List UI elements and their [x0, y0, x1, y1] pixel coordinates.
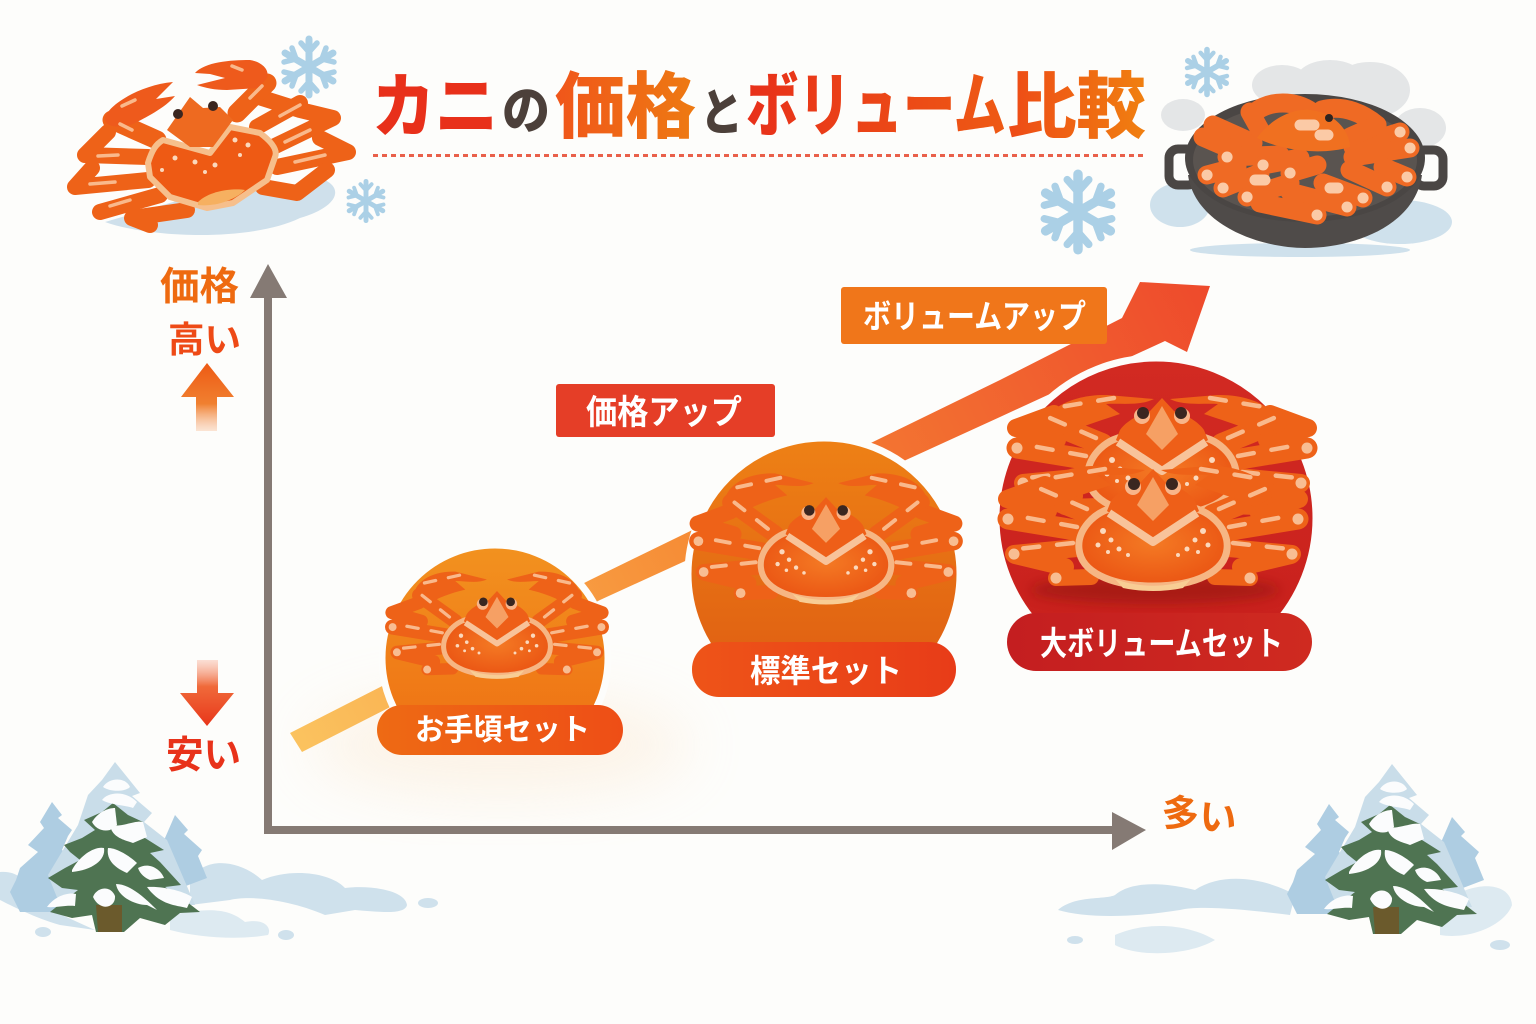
title: カニ: [372, 68, 498, 146]
illustration: crab top left: [75, 60, 348, 235]
icon: snowflake top right: [1187, 50, 1227, 94]
callout: price up: 価格アップ: [586, 394, 742, 432]
standard set label: [692, 642, 956, 697]
small set label: お手頃セット: [415, 714, 590, 747]
illustration: snow clouds behind pot: [1161, 60, 1446, 148]
title: [372, 67, 1146, 148]
title: と: [700, 85, 743, 141]
large set label: 大ボリュームセット: [1040, 625, 1283, 662]
title dotted underline: [373, 154, 1146, 157]
y axis arrow: [250, 264, 1146, 850]
illustration: snowy tree right: [1287, 764, 1484, 934]
large set rear crab: [1016, 395, 1308, 520]
label: low: 安い: [166, 735, 241, 777]
callout: price up: [556, 384, 775, 437]
illustration: snow bank right: [1058, 879, 1512, 953]
callout: volume up: [841, 287, 1107, 344]
y axis heading: 価格: [160, 266, 239, 309]
icon: down arrow: [180, 660, 234, 726]
large set label: [1007, 613, 1312, 671]
illustration: snowy tree left: [10, 762, 207, 932]
label: high: 高い: [168, 319, 241, 360]
peach wash under chart: [310, 695, 690, 795]
title: の: [502, 83, 550, 141]
icon: snowflake centre right: [1044, 174, 1112, 250]
callout: volume up: ボリュームアップ: [863, 298, 1086, 335]
standard set label: 標準セット: [750, 653, 902, 689]
icon: snowflake top left large: [284, 39, 334, 95]
title: 価格: [555, 68, 696, 148]
panel: small set: [377, 545, 623, 771]
panel: large set: [996, 358, 1316, 678]
illustration: snow bank left: [0, 863, 438, 940]
icon: snowflake top left small: [348, 181, 384, 221]
illustration: crab pot: [1169, 94, 1443, 248]
illustration: snow under pot: [1150, 183, 1452, 257]
icon: up arrow: [181, 363, 234, 431]
title: 比較: [1007, 68, 1146, 148]
large set front crab: [1007, 466, 1299, 591]
standard set crab: [698, 473, 954, 605]
x axis label: 多い: [1159, 792, 1239, 842]
title: ボリューム: [746, 67, 1006, 145]
panel: standard set: [688, 438, 960, 710]
small set label: [377, 705, 623, 755]
small set crab: [392, 572, 602, 679]
diagonal trend arrow: [290, 282, 1210, 752]
